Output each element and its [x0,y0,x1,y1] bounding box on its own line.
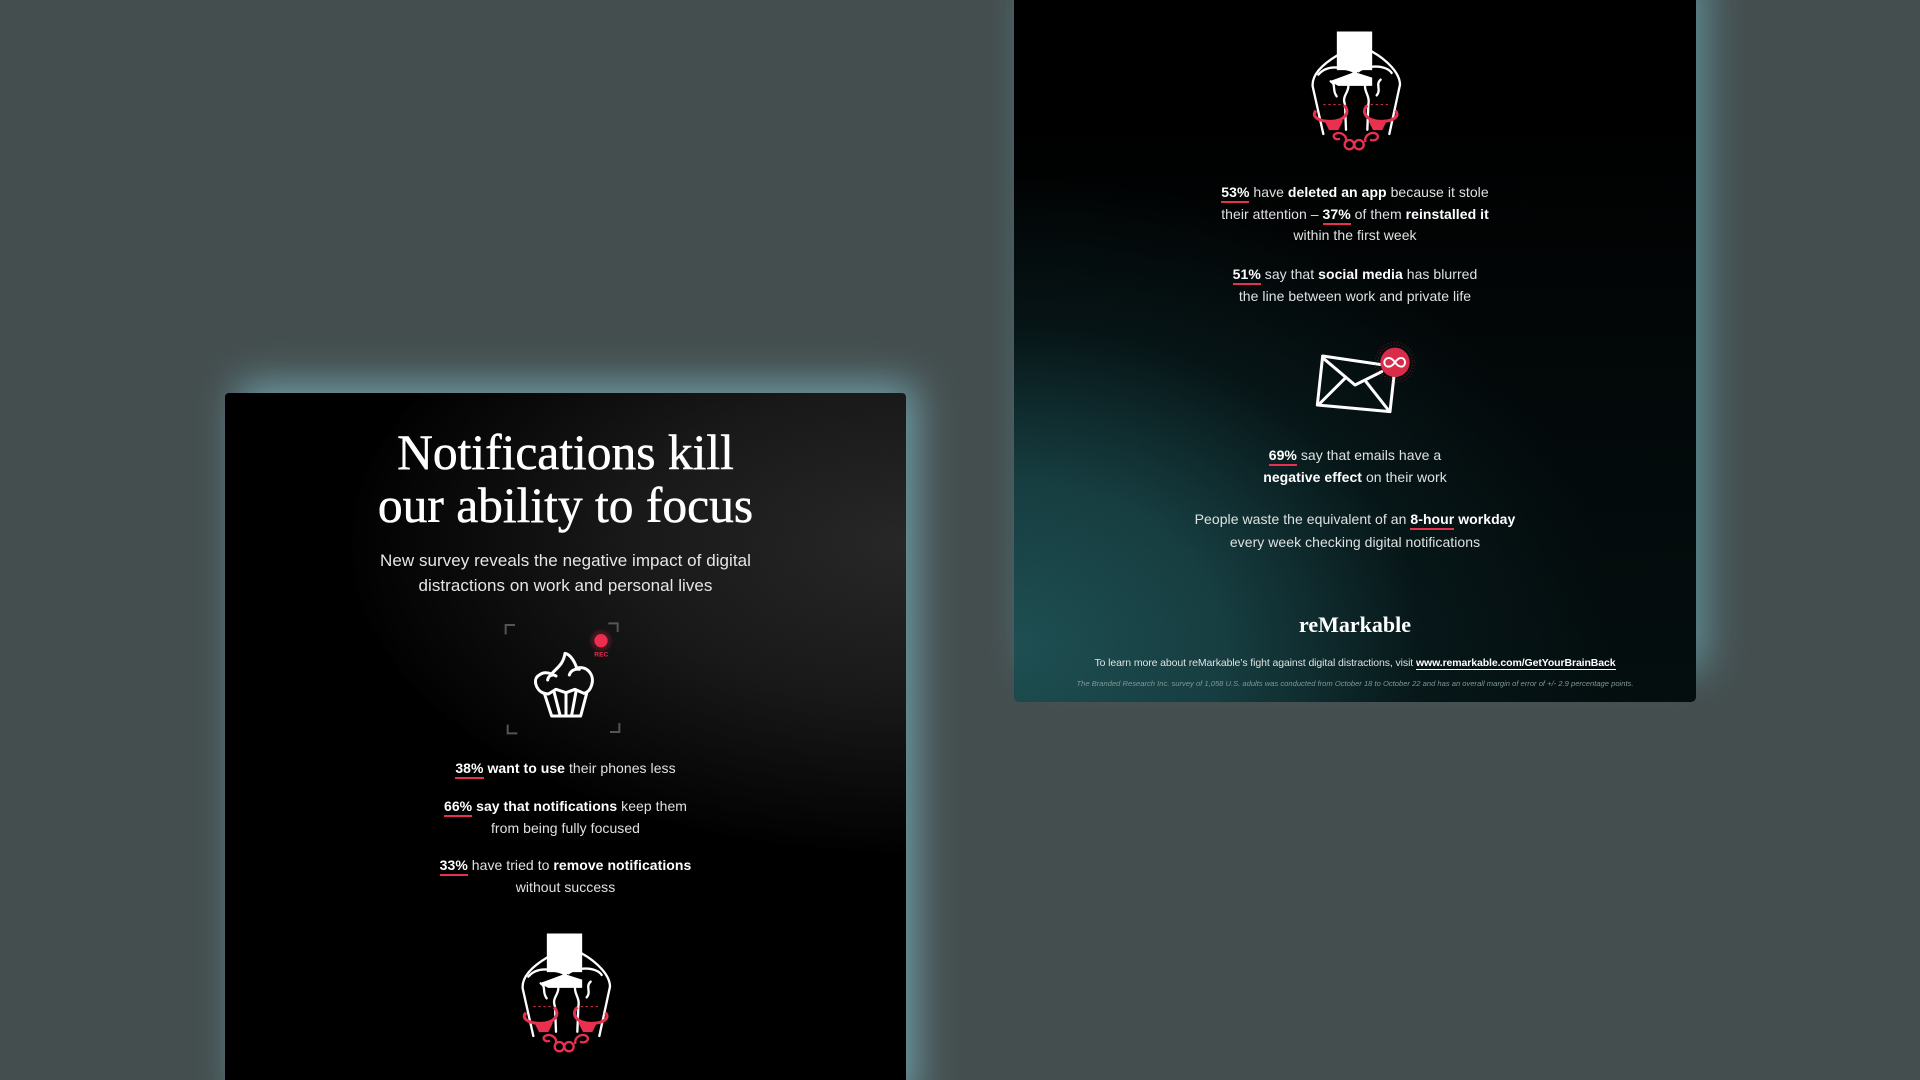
title: our ability to focus [378,478,753,533]
camera frame brackets [506,623,619,733]
stat: deleted an app: their attention – 37% of them reinstalled it [1221,206,1489,222]
record dot [590,630,612,659]
icon: recording cupcake [504,622,620,734]
title [378,425,753,533]
cuffs and chain [524,1007,607,1051]
stat: wasted workday: every week checking digital notifications [1230,534,1480,550]
stat: deleted an app [1221,184,1489,243]
subtitle: New survey reveals the negative impact of digital [380,551,751,570]
icon: envelope with infinity badge [1316,342,1416,414]
stat: social media: the line between work and private life [1239,288,1471,304]
stat: notifications [444,798,687,836]
stat: wasted workday [1195,511,1516,550]
stat: social media [1233,266,1477,304]
stat: social media: 51% say that social media has blurred [1233,266,1477,282]
stat: remove notifications: without success [516,878,615,894]
panel: left infographic page [225,393,906,1080]
panel: right infographic page [1014,0,1696,702]
icon: handcuffed hands holding phone [521,934,612,1052]
survey footnote: The Branded Research Inc. survey of 1,058 U.S. adults was conducted from October 18 to October 22 and has an overall margin of error of +/- 2.9 percentage points. [1076,679,1633,688]
subtitle: distractions on work and personal lives [419,576,712,595]
title: Notifications kill [397,425,734,480]
icon: handcuffed hands holding phone [1311,32,1402,150]
phone and hands [1313,32,1400,134]
call to action with link: To learn more about reMarkable’s fight against digital distractions, visit www.remarkable.com/GetYourBrainBack [1094,657,1616,669]
glow behind right panel [1030,0,1706,670]
stat: phones: 38% want to use their phones less [455,760,676,776]
stat: notifications: from being fully focused [491,820,640,836]
logo: reMarkable: reMarkable [1299,612,1411,637]
stat: deleted an app: within the first week [1293,227,1417,243]
record dot: REC [594,652,609,659]
infinity badge [1375,342,1415,382]
stat: wasted workday: People waste the equivalent of an 8-hour workday [1195,511,1515,527]
cupcake [536,653,592,716]
stat: emails: 69% say that emails have a [1269,447,1441,463]
subtitle [380,551,751,595]
stat: emails [1263,447,1447,485]
stat: remove notifications [440,857,691,894]
stat: deleted an app: 53% have deleted an app because it stole [1221,184,1489,200]
envelope [1317,356,1395,412]
stat: remove notifications: 33% have tried to remove notifications [440,857,691,873]
glow behind left panel [238,384,916,1080]
phone and hands [523,934,610,1036]
stat: emails: negative effect on their work [1263,468,1447,484]
stat: notifications: 66% say that notifications keep them [444,798,687,814]
cuffs and chain [1314,105,1397,149]
